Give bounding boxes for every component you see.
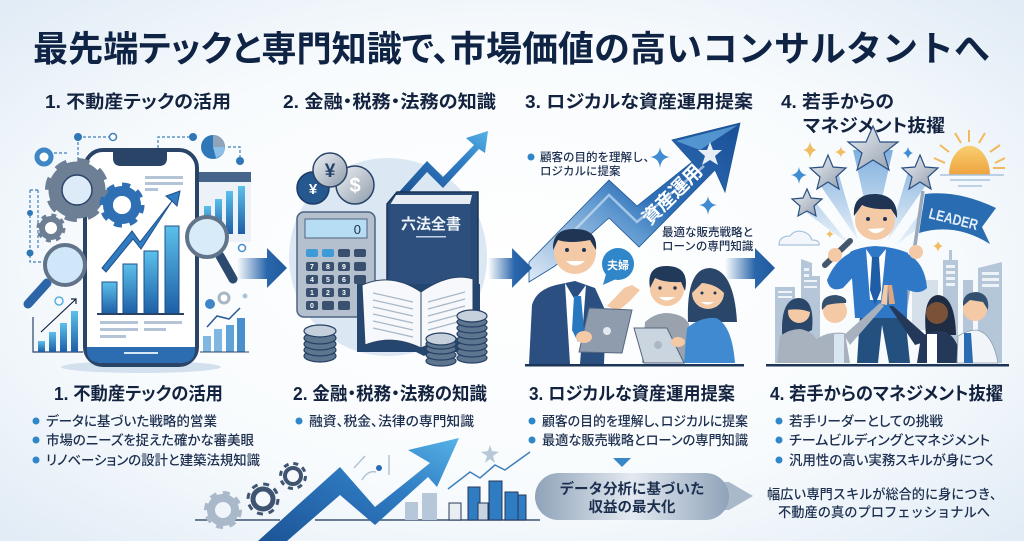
annotation: 顧客の目的: 顧客の目的を理解し、: [540, 150, 655, 164]
decorative nodes: [354, 455, 389, 480]
advisor: [529, 229, 640, 364]
coins: [297, 153, 374, 204]
bullet text: 最適な販売戦略とローンの専門知識: [542, 432, 748, 448]
cloud: [779, 231, 819, 245]
down triangle: [613, 458, 631, 467]
small star: [481, 445, 499, 463]
summary 3: [528, 383, 748, 448]
calculator: 2: [326, 290, 330, 297]
phone with bar chart: [85, 150, 197, 365]
conclusion text: 幅広い専門スキルが総合的に身につき、: [767, 486, 1003, 502]
bullet text: 汎用性の高い実務スキルが身につく: [789, 452, 994, 468]
calculator: 0: [310, 303, 314, 310]
sun: [934, 130, 1005, 186]
bullet text: チームビルディングとマネジメント: [789, 432, 990, 448]
calculator: 3: [342, 290, 346, 297]
small grey gear: [38, 215, 64, 241]
conclusion text: 不動産の真のプロフェッショナルへ: [778, 504, 990, 520]
annotation: 顧客の目的: ロジカルに提案: [540, 164, 621, 178]
coins: ¥: [325, 161, 336, 182]
calculator: 1: [310, 290, 314, 297]
summary 1: [32, 384, 260, 468]
bullet text: 顧客の目的を理解し、ロジカルに提案: [542, 413, 748, 429]
sparkles: [650, 147, 717, 215]
speech bubble 夫婦: 夫婦: [607, 258, 629, 272]
ground line: [766, 364, 1009, 366]
big rising arrow: [529, 123, 740, 282]
bullet: [296, 418, 302, 424]
backdrop circle: [289, 158, 487, 356]
right magnifier: [187, 217, 233, 279]
city buildings: [775, 250, 1002, 363]
arrow highlight: [560, 166, 704, 245]
calculator: [297, 212, 375, 317]
heading: 4. 若手からのマネジメント抜擢: [770, 383, 1003, 404]
bullet dot: [528, 154, 534, 160]
law book 六法全書: 六法全書: [401, 215, 461, 233]
pill arrow: [700, 482, 753, 510]
bottom growth illustration: [195, 438, 540, 541]
title: [33, 29, 990, 69]
lower right mini chart: [200, 244, 249, 352]
calculator: 7: [310, 264, 314, 271]
coin stacks: [304, 310, 487, 366]
arrow label 資産運用: 資産運用: [638, 160, 707, 230]
couple: [634, 266, 737, 363]
panel 4: young management illustration: [766, 92, 1009, 366]
flag LEADER: [905, 191, 996, 312]
law book 六法全書: [387, 192, 478, 300]
small trend line: [448, 452, 530, 489]
speech bubble 夫婦: [602, 248, 634, 285]
team members: [777, 285, 998, 363]
calculator: 9: [342, 264, 346, 271]
bullets: [528, 418, 536, 444]
pill: data-driven profit maximization: 収益の最大化: [588, 499, 676, 516]
arrow star: [698, 142, 722, 165]
calculator: 8: [326, 264, 330, 271]
panel 3: logical asset proposal illustration: [525, 91, 754, 366]
arrow: step 1 to 2: [237, 248, 287, 288]
annotation: 販売戦略: 最適な販売戦略と: [662, 225, 754, 239]
leader figure: [825, 194, 927, 363]
rising arrow: [399, 131, 488, 192]
open book: [357, 277, 480, 356]
phone shadow: [61, 361, 221, 373]
mini city: [405, 481, 526, 520]
bullet text: リノベーションの設計と建築法規知識: [46, 452, 260, 468]
bullet text: 市場のニーズを捉えた確かな審美眼: [46, 432, 254, 448]
calculator: 0: [354, 222, 361, 237]
small blue gear: [37, 150, 51, 164]
blue sparkles: [791, 147, 913, 184]
calculator: 6: [342, 277, 346, 284]
heading: panel 3: 3. ロジカルな資産運用提案: [525, 91, 753, 112]
blue gear: [102, 185, 142, 225]
heading: 3. ロジカルな資産運用提案: [529, 383, 735, 404]
conclusion text: [767, 486, 1003, 520]
heading: panel 1: 1. 不動産テックの活用: [45, 92, 231, 112]
heading: panel 4: 4. 若手からの: [781, 92, 894, 112]
coins: ¥: [309, 181, 318, 198]
title: 最先端テックと専門知識で、: [33, 29, 450, 69]
gold sparkles: [803, 141, 943, 252]
pie chart icon: [201, 135, 225, 159]
lower left mini chart: [33, 297, 83, 352]
bullet text: データに基づいた戦略的営業: [46, 413, 217, 429]
annotation: 販売戦略: ローンの専門知識: [662, 239, 754, 253]
panel 2: finance, tax and law illustration: [283, 92, 496, 366]
left magnifier: [28, 245, 85, 304]
panel 1: real-estate tech illustration: [26, 92, 251, 373]
arrow: step 2 to 3: [488, 248, 532, 288]
pill: data-driven profit maximization: [535, 473, 729, 520]
summary 4: [770, 383, 1003, 468]
ground line: [525, 364, 744, 366]
connector nodes: [26, 133, 244, 256]
heading: panel 2: 2. 金融・税務・法務の知識: [283, 92, 496, 112]
calculator: 5: [326, 277, 330, 284]
gear outline middle: [248, 484, 278, 514]
summary 2: [293, 384, 487, 429]
heading: panel 4: マネジメント抜擢: [803, 115, 945, 136]
big growth arrow: [258, 438, 459, 541]
light rays: [800, 150, 940, 245]
bullet text: 融資、税金、法律の専門知識: [309, 413, 475, 429]
ground line: [195, 519, 540, 521]
coins: $: [349, 175, 361, 197]
large grey gear: [48, 161, 106, 219]
browser window chart: [197, 172, 251, 242]
calculator: 4: [310, 277, 314, 284]
bullets: [776, 418, 782, 464]
gear outline upper: [280, 464, 306, 488]
hollow node: [110, 134, 116, 140]
heading: 1. 不動産テックの活用: [54, 384, 223, 404]
pill: data-driven profit maximization: データ分析に基づいた: [560, 480, 704, 498]
dashed connectors: [30, 137, 240, 262]
bullet text: 若手リーダーとしての挑戦: [789, 413, 943, 429]
flag LEADER: LEADER: [927, 205, 980, 234]
arrow: step 3 to 4: [725, 248, 775, 289]
stars: [792, 126, 938, 216]
heading: 2. 金融・税務・法務の知識: [293, 384, 487, 404]
arrow head shine: [676, 125, 738, 150]
title: 市場価値の高いコンサルタントへ: [450, 29, 990, 69]
light gear: [206, 493, 240, 527]
bullets: [32, 418, 40, 464]
